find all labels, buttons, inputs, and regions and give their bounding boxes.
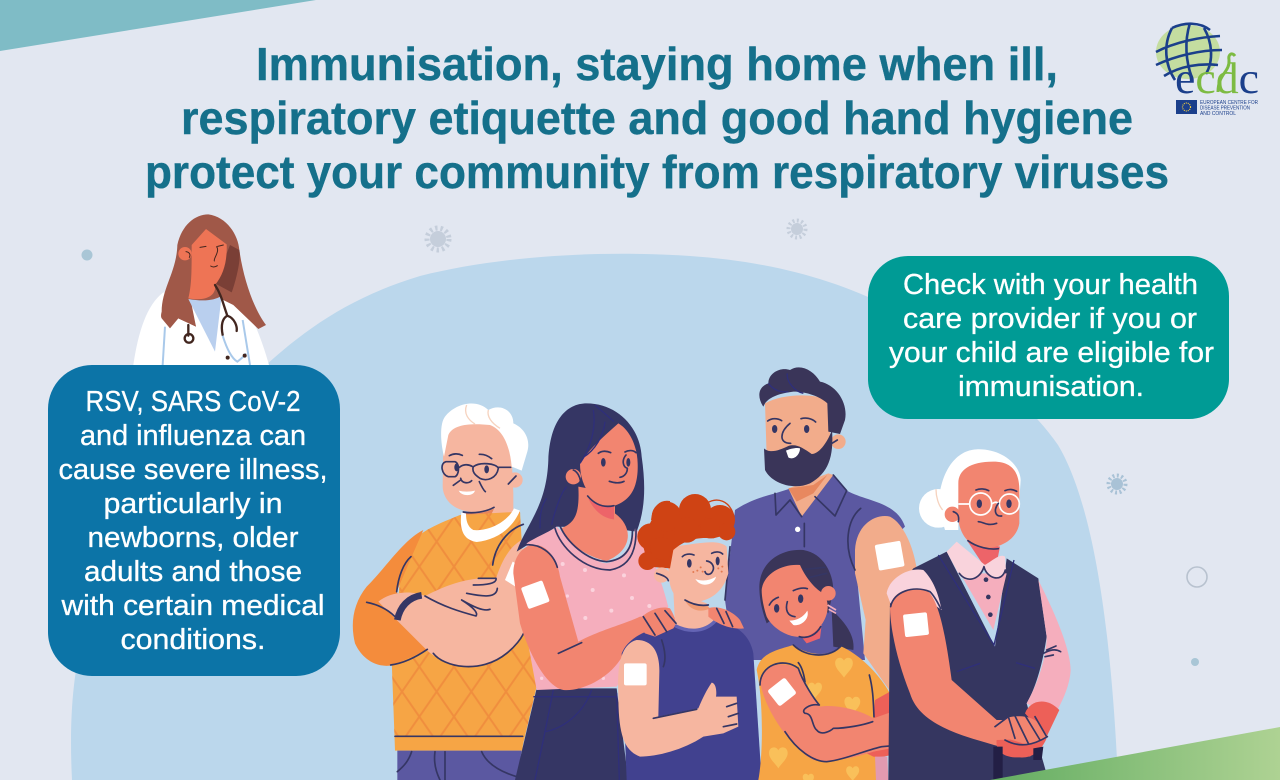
- dot right: [1191, 658, 1199, 666]
- hair: [441, 403, 528, 471]
- callout text: cause severe illness,: [58, 454, 328, 486]
- vest: [888, 552, 1048, 780]
- woman's left hand: [637, 607, 675, 637]
- face details: [977, 499, 982, 508]
- neck: [967, 540, 1000, 565]
- arm patch: [624, 663, 647, 685]
- panel: right callout: [868, 256, 1229, 419]
- neck: [788, 473, 833, 517]
- head: [958, 462, 1019, 548]
- crossed arms: [378, 540, 527, 667]
- agency name: DISEASE PREVENTION: [1200, 106, 1250, 112]
- arm: [855, 516, 917, 693]
- hands: [993, 715, 1048, 780]
- top: [525, 527, 668, 690]
- sleeve: [353, 530, 427, 666]
- arm patch: [903, 612, 929, 637]
- pants: [397, 751, 522, 780]
- arm: [618, 640, 738, 757]
- face details: [454, 463, 459, 471]
- right sleeve: [1027, 580, 1071, 717]
- callout text: [58, 386, 328, 656]
- hair: [759, 550, 833, 623]
- vest lines: [938, 555, 1035, 672]
- callout text: conditions.: [120, 624, 266, 656]
- ear: [831, 434, 846, 449]
- ear: [821, 586, 836, 601]
- ear: [654, 567, 669, 583]
- callout text: adults and those: [84, 556, 302, 588]
- neck: [673, 590, 717, 630]
- virus icon right: [1108, 476, 1126, 492]
- ear: [507, 472, 523, 488]
- callout text: your child are eligible for: [889, 337, 1215, 369]
- light blue blob: [71, 254, 1118, 780]
- figure: older man: [353, 403, 537, 780]
- callout text: [889, 269, 1215, 403]
- far sleeve: [873, 692, 903, 718]
- callout text: and influenza can: [80, 420, 306, 452]
- ring right: [1187, 567, 1207, 587]
- EU flag: [1176, 100, 1197, 114]
- hair: [919, 449, 1021, 530]
- arm patch: [521, 580, 550, 609]
- freckles: [692, 566, 723, 573]
- beard: [764, 430, 832, 486]
- face: [765, 395, 831, 463]
- dot left: [82, 250, 92, 260]
- head: [580, 423, 638, 506]
- arm patch: [767, 677, 797, 707]
- arm: [513, 545, 675, 690]
- hair: [161, 214, 266, 329]
- face details: [601, 458, 606, 467]
- dress: [757, 645, 890, 780]
- globe: [1156, 23, 1222, 80]
- neck: [465, 493, 513, 530]
- callout text: Check with your health: [903, 269, 1198, 301]
- blouse front: [948, 553, 1007, 630]
- decorative virus particles: [82, 220, 1207, 666]
- agency name: [1200, 100, 1258, 117]
- wristband: [397, 595, 422, 620]
- agency name: EUROPEAN CENTRE FOR: [1200, 100, 1258, 106]
- woman's right hand: [708, 607, 744, 629]
- face details: [772, 425, 777, 433]
- title: Immunisation, staying home when ill,: [256, 38, 1058, 90]
- agency name: AND CONTROL: [1200, 111, 1236, 117]
- face details: [687, 559, 692, 568]
- top dots: [540, 562, 651, 680]
- decorative teal corner: [0, 0, 316, 51]
- callout text: immunisation.: [958, 371, 1144, 403]
- dress hearts: [769, 658, 860, 780]
- neck and chest: [561, 487, 628, 561]
- shirt: [622, 618, 762, 780]
- hair: [637, 494, 735, 570]
- hair back: [517, 403, 644, 552]
- neck and face: [188, 229, 227, 299]
- hair: [759, 367, 846, 434]
- panel: left callout: [48, 365, 340, 676]
- ear: [945, 507, 960, 522]
- illustration: family: [353, 367, 1071, 780]
- shirt: [725, 475, 905, 660]
- callout text: care provider if you or: [903, 303, 1198, 335]
- collar: [461, 508, 520, 542]
- callout text: with certain medical: [60, 590, 324, 622]
- neckline: [555, 526, 636, 570]
- figure: boy: [618, 494, 762, 780]
- glasses: [958, 493, 1019, 515]
- stethoscope: [188, 285, 237, 336]
- coat lines: [163, 320, 250, 365]
- arm patch: [505, 562, 522, 587]
- callout text: newborns, older: [88, 522, 299, 554]
- ear: [178, 247, 192, 260]
- figure: girl: [757, 550, 908, 780]
- collar: [947, 542, 1006, 580]
- ponytail: [832, 610, 854, 650]
- figure: woman: [513, 403, 675, 780]
- collar: [675, 619, 717, 630]
- decorative green corner: [990, 727, 1280, 780]
- title: respiratory etiquette and good hand hygiene: [181, 92, 1133, 144]
- shirt lines: [725, 475, 861, 600]
- buttons: [984, 577, 993, 617]
- figure: older woman: [887, 449, 1071, 780]
- father leg sliver: [875, 757, 888, 780]
- hair lock: [178, 272, 196, 327]
- title: protect your community from respiratory viruses: [145, 146, 1169, 198]
- ear: [566, 469, 581, 484]
- ECDC logo: [1156, 23, 1259, 117]
- left sleeve: [887, 569, 942, 610]
- glasses: [442, 462, 511, 480]
- face details: [774, 604, 779, 613]
- sweater: [392, 512, 537, 750]
- hair shadow: [215, 245, 240, 292]
- arm: [890, 589, 1047, 757]
- pants: [515, 688, 628, 780]
- callout text: RSV, SARS CoV-2: [86, 386, 300, 418]
- callout text: particularly in: [104, 488, 282, 520]
- face details: [186, 245, 223, 267]
- title: [145, 38, 1169, 198]
- figure: father: [725, 367, 917, 693]
- face: [762, 565, 828, 637]
- neck: [800, 625, 822, 643]
- coat: [133, 291, 269, 365]
- virus icon left: [427, 228, 449, 250]
- virus icon centre: [788, 220, 806, 238]
- head: [668, 542, 728, 602]
- wordmark swirl: [1218, 54, 1235, 92]
- hair strands: [540, 405, 614, 528]
- icon: doctor: [133, 214, 269, 365]
- undershirt: [188, 296, 222, 352]
- arm patch: [875, 541, 905, 571]
- head: [443, 423, 513, 512]
- wordmark: ecdc: [1175, 54, 1259, 103]
- arm: [760, 664, 908, 761]
- cuff: [1025, 702, 1059, 737]
